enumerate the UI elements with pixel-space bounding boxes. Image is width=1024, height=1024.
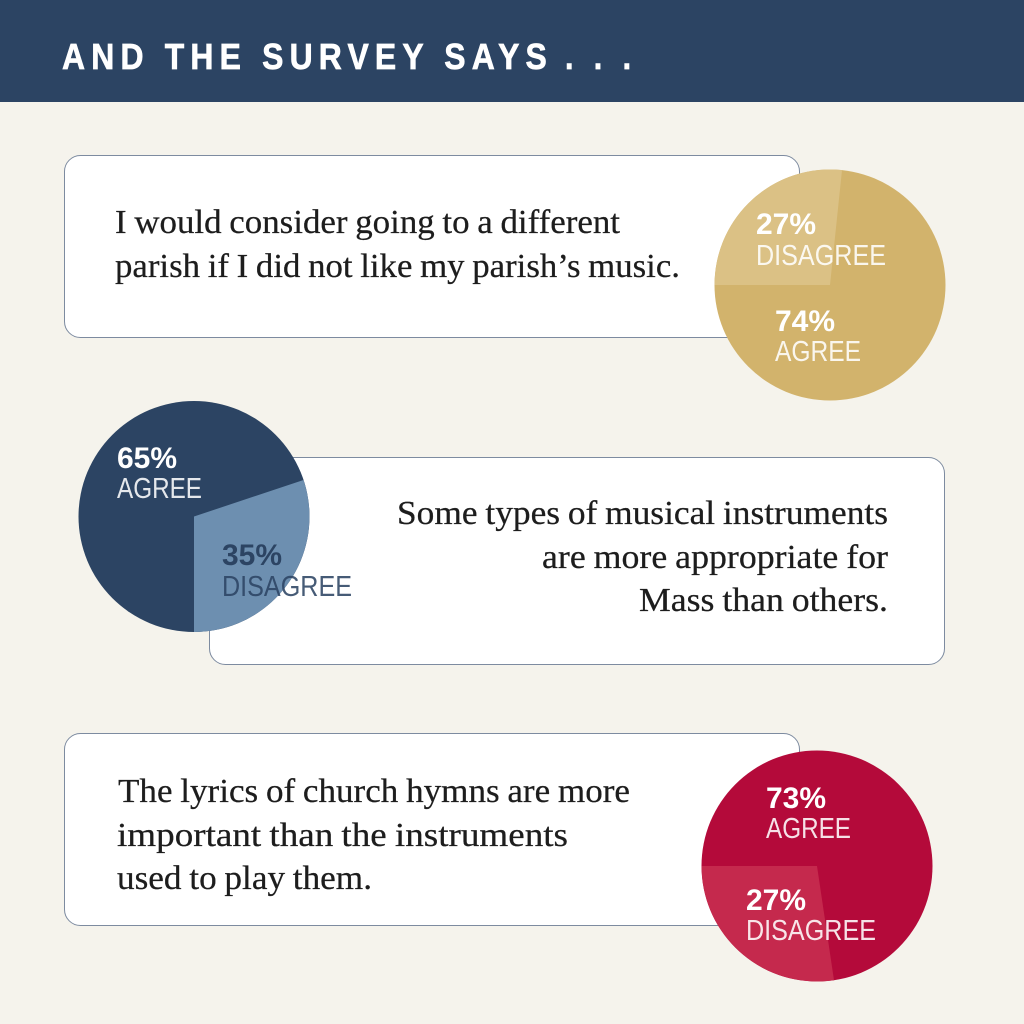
label: 73% agree: 73% xyxy=(766,782,826,815)
question text xyxy=(115,204,680,285)
label: 35% disagree xyxy=(222,539,352,603)
question text: used to play them. xyxy=(117,860,372,897)
label: 74% agree: 74% xyxy=(775,305,835,338)
question text: Mass than others. xyxy=(639,582,888,619)
label: 65% agree: 65% xyxy=(117,442,177,475)
label: 35% disagree: 35% xyxy=(222,539,282,572)
pie chart: navy xyxy=(78,401,352,632)
question text: important than the instruments xyxy=(117,817,568,854)
panel: instruments question xyxy=(210,458,944,664)
label: 35% disagree: DISAGREE xyxy=(222,571,352,603)
label: 27% disagree xyxy=(746,884,876,947)
label: 65% agree xyxy=(117,442,202,505)
label: 27% disagree: 27% xyxy=(746,884,806,917)
question text: I would consider going to a different xyxy=(115,204,621,241)
title: AND THE SURVEY SAYS xyxy=(62,36,553,77)
panel: parish music question xyxy=(64,156,800,338)
pie chart: crimson xyxy=(702,750,932,982)
label: 27% disagree: DISAGREE xyxy=(756,240,886,272)
pie chart: gold xyxy=(714,169,946,400)
title: . . . xyxy=(565,36,637,77)
question text xyxy=(397,495,889,619)
label: 27% disagree: 27% xyxy=(756,208,816,241)
label: 65% agree: AGREE xyxy=(117,473,202,505)
question text: Some types of musical instruments xyxy=(397,495,888,532)
question text: The lyrics of church hymns are more xyxy=(118,773,630,810)
label: 73% agree xyxy=(766,782,851,845)
label: 74% agree xyxy=(775,305,861,368)
label: 74% agree: AGREE xyxy=(775,336,861,368)
label: 27% disagree xyxy=(756,208,886,272)
question text: are more appropriate for xyxy=(542,539,889,576)
header band xyxy=(0,0,1024,102)
label: 27% disagree: DISAGREE xyxy=(746,915,876,947)
question text xyxy=(117,773,630,897)
question text: parish if I did not like my parish’s music. xyxy=(115,248,680,285)
panel: lyrics question xyxy=(64,734,800,926)
label: 73% agree: AGREE xyxy=(766,813,851,845)
